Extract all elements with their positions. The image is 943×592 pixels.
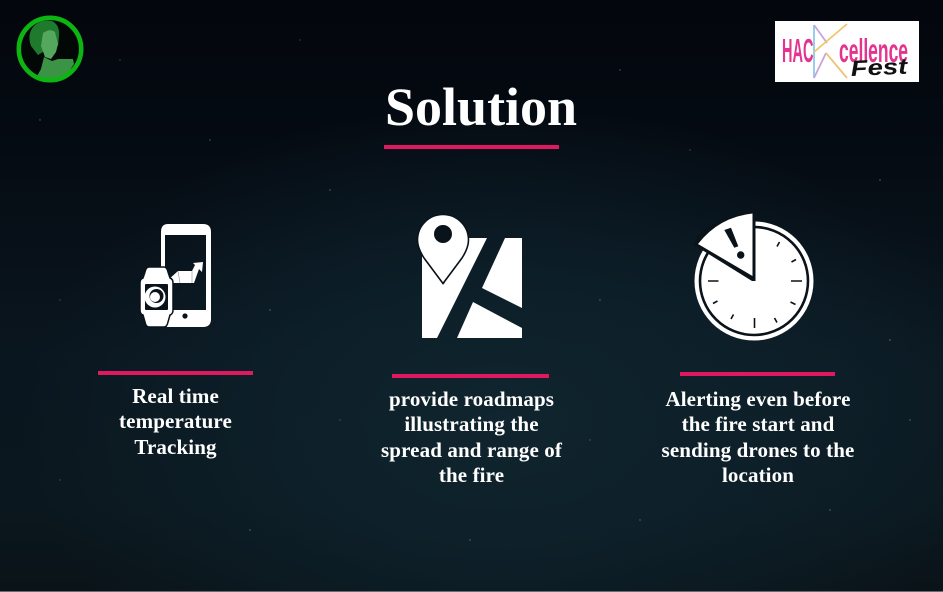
text: alerting description xyxy=(662,386,854,487)
text: alerting description: Alerting even before xyxy=(665,386,851,410)
text: roadmaps description: the fire xyxy=(439,463,504,487)
text: roadmaps description: spread and range of xyxy=(381,438,562,462)
text: roadmaps description xyxy=(381,386,562,487)
divider xyxy=(98,371,253,375)
text: real time temperature tracking: Real time xyxy=(132,384,219,408)
icon: phone and smartwatch xyxy=(140,224,211,328)
icon: clock with alert wedge xyxy=(694,214,814,340)
text: alerting description: location xyxy=(722,463,794,487)
text: real time temperature tracking: Tracking xyxy=(134,434,217,458)
text: real time temperature tracking xyxy=(119,384,232,458)
text: roadmaps description: provide roadmaps xyxy=(389,386,554,410)
text: alerting description: the fire start and xyxy=(682,412,834,436)
logo wordmark HAC: HAC xyxy=(782,32,813,69)
panel: temperature tracking xyxy=(98,224,253,458)
logo wordmark Fest: Fest xyxy=(850,54,908,81)
logo: HacXcellence Fest xyxy=(775,21,919,82)
panel: roadmaps xyxy=(381,215,562,487)
title: Solution xyxy=(385,77,577,137)
panel: early alert xyxy=(662,214,854,487)
divider xyxy=(680,372,835,376)
text: roadmaps description: illustrating the xyxy=(404,412,539,436)
divider xyxy=(392,374,549,378)
icon: green statue portrait badge xyxy=(16,16,84,82)
text: real time temperature tracking: temperature xyxy=(119,409,232,433)
icon: map with location pin xyxy=(417,215,522,338)
text: alerting description: sending drones to the xyxy=(662,438,854,462)
title underline xyxy=(384,145,559,149)
logo wordmark cellence: cellence xyxy=(839,32,908,69)
logo star mark xyxy=(813,23,848,78)
